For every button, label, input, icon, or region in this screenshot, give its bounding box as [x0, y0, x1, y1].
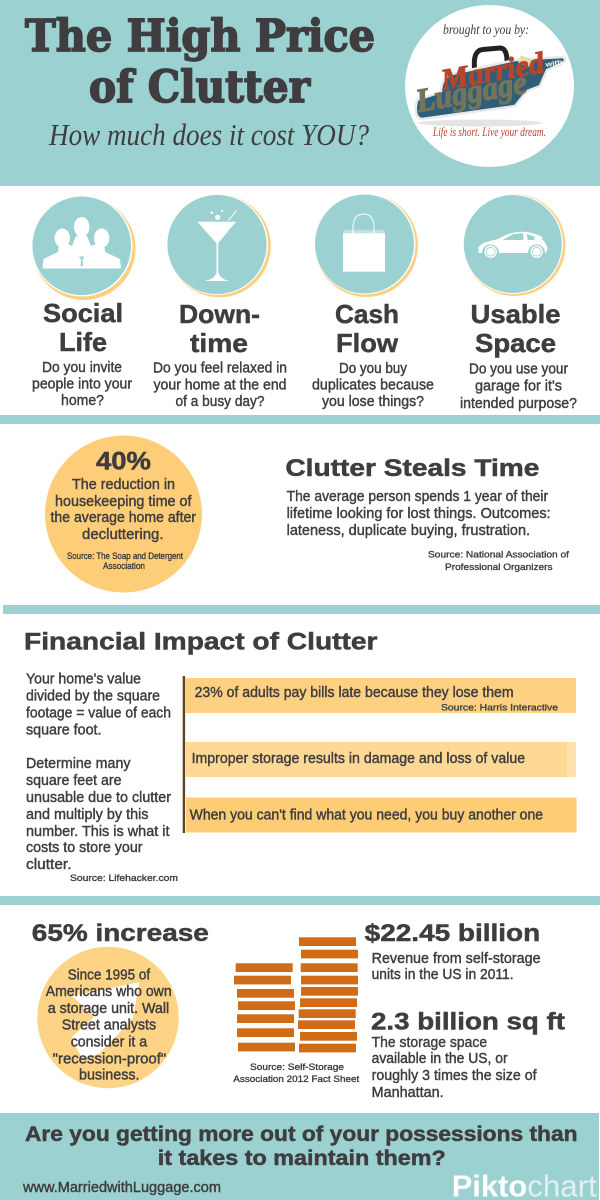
- stat: revenue: [365, 920, 541, 983]
- text: source national association: Source: National Association of: [428, 550, 569, 560]
- text: downtime question: your home at the end: [154, 378, 286, 394]
- panel: usable space: [460, 194, 577, 412]
- logo badge: with: [544, 59, 563, 69]
- bar: bills late: [185, 678, 576, 714]
- callout: storage unit circle: a storage unit. Wall: [48, 1001, 169, 1017]
- text: social life question: [32, 360, 132, 409]
- heading: 65 percent increase: 65% increase: [32, 920, 209, 947]
- text: home value explanation: Your home's value: [26, 672, 141, 688]
- callout: 40 percent circle: housekeeping time of: [55, 494, 192, 510]
- bar: bills late: 23% of adults pay bills late because they lose them: [195, 685, 514, 701]
- text: source national association: [428, 550, 569, 573]
- heading: usable space: [470, 299, 560, 358]
- text: cash flow question: duplicates because: [312, 378, 434, 394]
- heading: financial impact: Financial Impact of Clutter: [24, 628, 378, 656]
- stat: revenue: Revenue from self-storage: [372, 951, 541, 967]
- heading: closing question: [25, 1123, 578, 1170]
- stat: storage space: 2.3 billion sq ft: [371, 1008, 565, 1036]
- callout: storage unit circle: Americans who own: [46, 984, 172, 1000]
- heading: usable space: Usable: [470, 299, 560, 329]
- text: social life question: people into your: [32, 376, 132, 392]
- text: home value explanation: footage = value of each: [26, 706, 171, 722]
- subtitle: How much does it cost YOU?: [48, 117, 369, 152]
- logo badge: Married: [437, 46, 548, 97]
- panel: financial impact: [24, 628, 576, 884]
- text: usable space question: intended purpose?: [460, 396, 577, 412]
- heading: cash flow: Cash: [335, 299, 399, 329]
- vertical axis bar: [183, 676, 185, 833]
- stat: storage space: roughly 3 times the size of: [372, 1068, 538, 1084]
- panel: downtime: [153, 194, 287, 410]
- text: downtime question: of a busy day?: [176, 394, 264, 410]
- text: home value explanation: square foot.: [26, 722, 102, 738]
- callout: 40 percent circle: Source: The Soap and Detergent: [67, 551, 183, 562]
- text: clutter steals time body: lateness, duplicate buying, frustration.: [287, 523, 530, 539]
- text: usable space question: garage for it's: [475, 378, 562, 394]
- text: home value explanation: costs to store your: [26, 840, 143, 856]
- panel: header: [0, 0, 600, 186]
- callout: 40 percent circle: The reduction in: [72, 477, 175, 493]
- text: home value explanation: clutter.: [26, 857, 72, 873]
- heading: closing question: it takes to maintain them?: [158, 1147, 446, 1170]
- text: downtime question: [153, 360, 287, 410]
- icon: car: [463, 194, 566, 296]
- icon: suitcase handle: [474, 48, 507, 68]
- text: source self-storage: Association 2012 Fact Sheet: [233, 1074, 360, 1085]
- text: downtime question: Do you feel relaxed in: [153, 360, 287, 376]
- text: social life question: home?: [61, 393, 104, 409]
- stat: storage space: Manhattan.: [372, 1085, 444, 1101]
- text: cash flow question: [312, 361, 434, 410]
- icon: white arrow: [71, 982, 139, 1058]
- panel: storage stats: [32, 920, 565, 1101]
- stat: storage space: available in the US, or: [372, 1051, 508, 1067]
- heading: social life: Life: [59, 327, 107, 357]
- bar: buy another: When you can't find what you need, you buy another one: [190, 808, 543, 824]
- stat: storage space: [371, 1008, 565, 1101]
- heading: cash flow: [335, 299, 399, 358]
- stat: storage space: The storage space: [372, 1035, 487, 1051]
- heading: cash flow: Flow: [336, 328, 399, 358]
- title: The High Price: [25, 11, 375, 62]
- text: home value explanation: Determine many: [26, 756, 131, 772]
- panel: footer: [0, 1113, 599, 1200]
- callout: 40 percent circle: decluttering.: [82, 527, 164, 543]
- callout: 40 percent circle: 40%: [96, 448, 151, 476]
- bar: bills late: Source: Harris Interactive: [441, 702, 558, 714]
- stat: revenue: units in the US in 2011.: [372, 967, 514, 983]
- text: clutter steals time body: [287, 489, 551, 539]
- callout: 40 percent circle: [45, 436, 202, 592]
- bar: improper storage: [185, 742, 576, 777]
- panel: cash flow: [312, 194, 434, 410]
- callout: 40 percent circle: the average home after: [50, 510, 196, 526]
- bar: improper storage: Improper storage results in damage and loss of value: [192, 751, 525, 767]
- title: of Clutter: [89, 62, 311, 113]
- text: website: www.MarriedwithLuggage.com: [22, 1180, 221, 1196]
- text: home value explanation: [26, 672, 178, 884]
- logo: piktochart: [452, 1168, 597, 1200]
- callout: storage unit circle: [37, 947, 179, 1088]
- logo badge: Life is short. Live your dream.: [432, 125, 546, 139]
- text: cash flow question: Do you buy: [339, 361, 408, 377]
- bar: buy another: [186, 798, 576, 832]
- text: home value explanation: number. This is what it: [26, 824, 170, 840]
- text: source national association: Professional Organizers: [445, 562, 553, 573]
- callout: storage unit circle: Street analysts: [62, 1018, 156, 1034]
- callout: storage unit circle: "recession-proof": [53, 1052, 166, 1068]
- logo badge: [405, 5, 574, 167]
- panel: clutter steals time: [45, 436, 569, 592]
- text: usable space question: [460, 362, 577, 412]
- heading: social life: Social: [43, 298, 123, 328]
- icon: martini: [167, 194, 271, 297]
- icon: people: [32, 196, 136, 300]
- callout: storage unit circle: Since 1995 of: [68, 968, 151, 984]
- heading: downtime: [179, 299, 260, 358]
- text: cash flow question: you lose things?: [322, 394, 424, 410]
- heading: usable space: Space: [475, 328, 556, 358]
- icon: shopping bag: [314, 194, 418, 297]
- chart: stacked bricks: [234, 937, 358, 1052]
- callout: storage unit circle: consider it a: [71, 1034, 148, 1050]
- heading: social life: [43, 298, 123, 357]
- heading: downtime: time: [190, 328, 248, 358]
- text: usable space question: Do you use your: [469, 362, 568, 378]
- text: home value explanation: Source: Lifehacker.com: [70, 873, 178, 884]
- text: home value explanation: divided by the square: [26, 688, 160, 704]
- text: home value explanation: unusable due to clutter: [26, 790, 171, 806]
- heading: clutter steals time: Clutter Steals Time: [285, 455, 539, 482]
- logo badge: Luggage: [412, 65, 530, 120]
- text: clutter steals time body: lifetime looking for lost things. Outcomes:: [287, 506, 551, 522]
- text: source self-storage: [233, 1062, 360, 1085]
- text: source self-storage: Source: Self-Storage: [250, 1062, 344, 1073]
- callout: storage unit circle: business.: [79, 1068, 140, 1084]
- panel: social life: [32, 196, 136, 409]
- heading: closing question: Are you getting more out of your possessions than: [25, 1123, 578, 1146]
- text: social life question: Do you invite: [42, 360, 122, 376]
- text: home value explanation: square feet are: [26, 773, 122, 789]
- stat: revenue: $22.45 billion: [365, 920, 540, 947]
- title: [25, 11, 375, 113]
- text: clutter steals time body: The average person spends 1 year of their: [287, 489, 548, 505]
- callout: 40 percent circle: Association: [103, 561, 145, 572]
- heading: downtime: Down-: [179, 299, 260, 329]
- text: home value explanation: and multiply by this: [26, 807, 148, 823]
- logo badge: brought to you by:: [443, 23, 529, 38]
